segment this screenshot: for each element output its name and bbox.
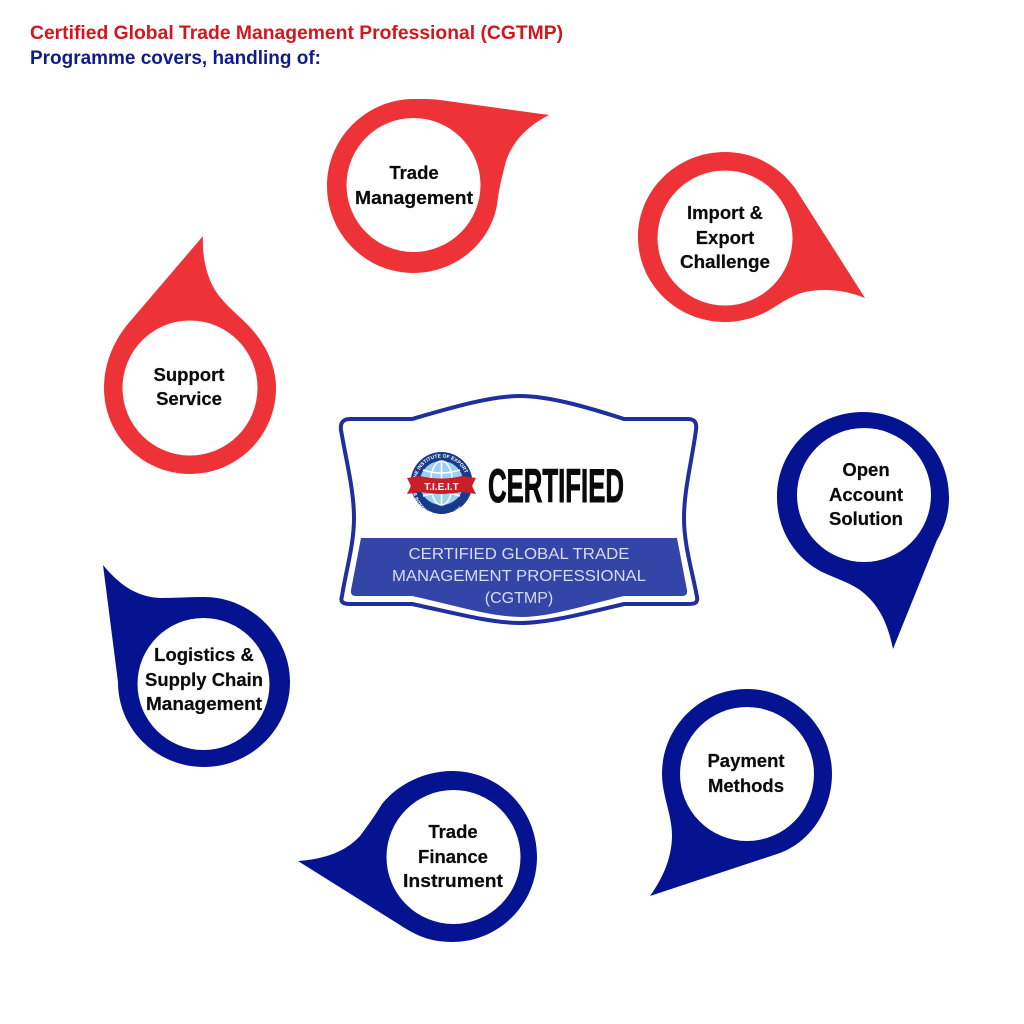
banner text: (CGTMP) [485, 590, 553, 607]
pin: Import & Export Challenge: Challenge [680, 251, 770, 272]
logo: T.I.E.I.T seal: T.I.E.I.T [424, 482, 459, 493]
pin: Logistics & Supply Chain Management: Management [146, 693, 262, 714]
pin: Payment Methods: Methods [708, 775, 784, 796]
pin: Trade Finance Instrument: Instrument [403, 870, 503, 891]
certified word: CERTIFIED [488, 459, 624, 512]
pin: Support Service: Support [154, 364, 224, 385]
pin: Trade Management: Management [355, 187, 473, 208]
pin: Support Service [104, 236, 276, 474]
badge banner [351, 538, 687, 617]
pin: Open Account Solution: Open [842, 459, 890, 480]
pin: Import & Export Challenge [638, 152, 865, 322]
pin: Import & Export Challenge: Import & [687, 202, 763, 223]
banner text [392, 546, 646, 607]
pin: Trade Finance Instrument: Trade [428, 821, 478, 842]
pin: Trade Management: Trade [389, 162, 439, 183]
title: Certified Global Trade Management Professional (CGTMP) [30, 23, 563, 44]
banner text: CERTIFIED GLOBAL TRADE [408, 546, 630, 563]
certified badge [338, 394, 700, 625]
pin: Logistics & Supply Chain Management: Supply Chain [145, 669, 263, 690]
banner text: MANAGEMENT PROFESSIONAL [392, 568, 646, 585]
title [30, 23, 563, 69]
pin: Logistics & Supply Chain Management [103, 565, 290, 767]
pin: Trade Finance Instrument: Finance [418, 846, 488, 867]
pin: Payment Methods: Payment [707, 750, 785, 771]
title: Programme covers, handling of: [30, 48, 321, 69]
badge outline [341, 396, 697, 623]
pin: Support Service: Service [156, 388, 222, 409]
pin: Open Account Solution [777, 412, 949, 649]
pin: Open Account Solution: Solution [829, 508, 903, 529]
ribbon [407, 476, 476, 494]
pin: Logistics & Supply Chain Management: Logistics & [154, 644, 254, 665]
pin: Payment Methods [650, 689, 832, 896]
pin: Import & Export Challenge: Export [696, 227, 754, 248]
logo: T.I.E.I.T seal [407, 452, 476, 514]
logo: T.I.E.I.T seal: & INTERNATIONAL TRADE [413, 493, 461, 514]
pin: Open Account Solution: Account [829, 484, 903, 505]
pin: Trade Management [327, 99, 549, 273]
pin: Trade Finance Instrument [298, 771, 537, 942]
logo: T.I.E.I.T seal: THE INSTITUTE OF EXPORT [413, 454, 468, 477]
